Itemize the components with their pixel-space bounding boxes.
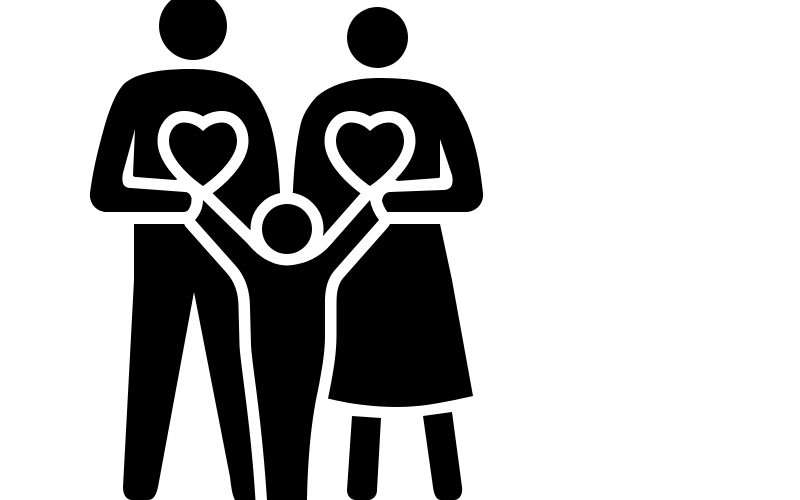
woman upper body and arm (292, 78, 483, 240)
woman left leg (347, 416, 381, 500)
man upper body and arm (90, 69, 282, 240)
man head (159, 0, 227, 60)
woman head (347, 7, 408, 68)
child body with raised arms (195, 200, 379, 500)
child head (262, 204, 312, 254)
woman dress (320, 224, 473, 407)
figure: child (195, 200, 379, 500)
figure: woman (292, 7, 483, 500)
icon: woman's heart (336, 122, 404, 186)
woman right leg (423, 412, 462, 500)
figure: man (90, 0, 282, 500)
woman arm outline (370, 139, 453, 192)
icon: man's heart (169, 122, 237, 186)
man legs (123, 224, 262, 500)
man arm outline (122, 129, 205, 192)
